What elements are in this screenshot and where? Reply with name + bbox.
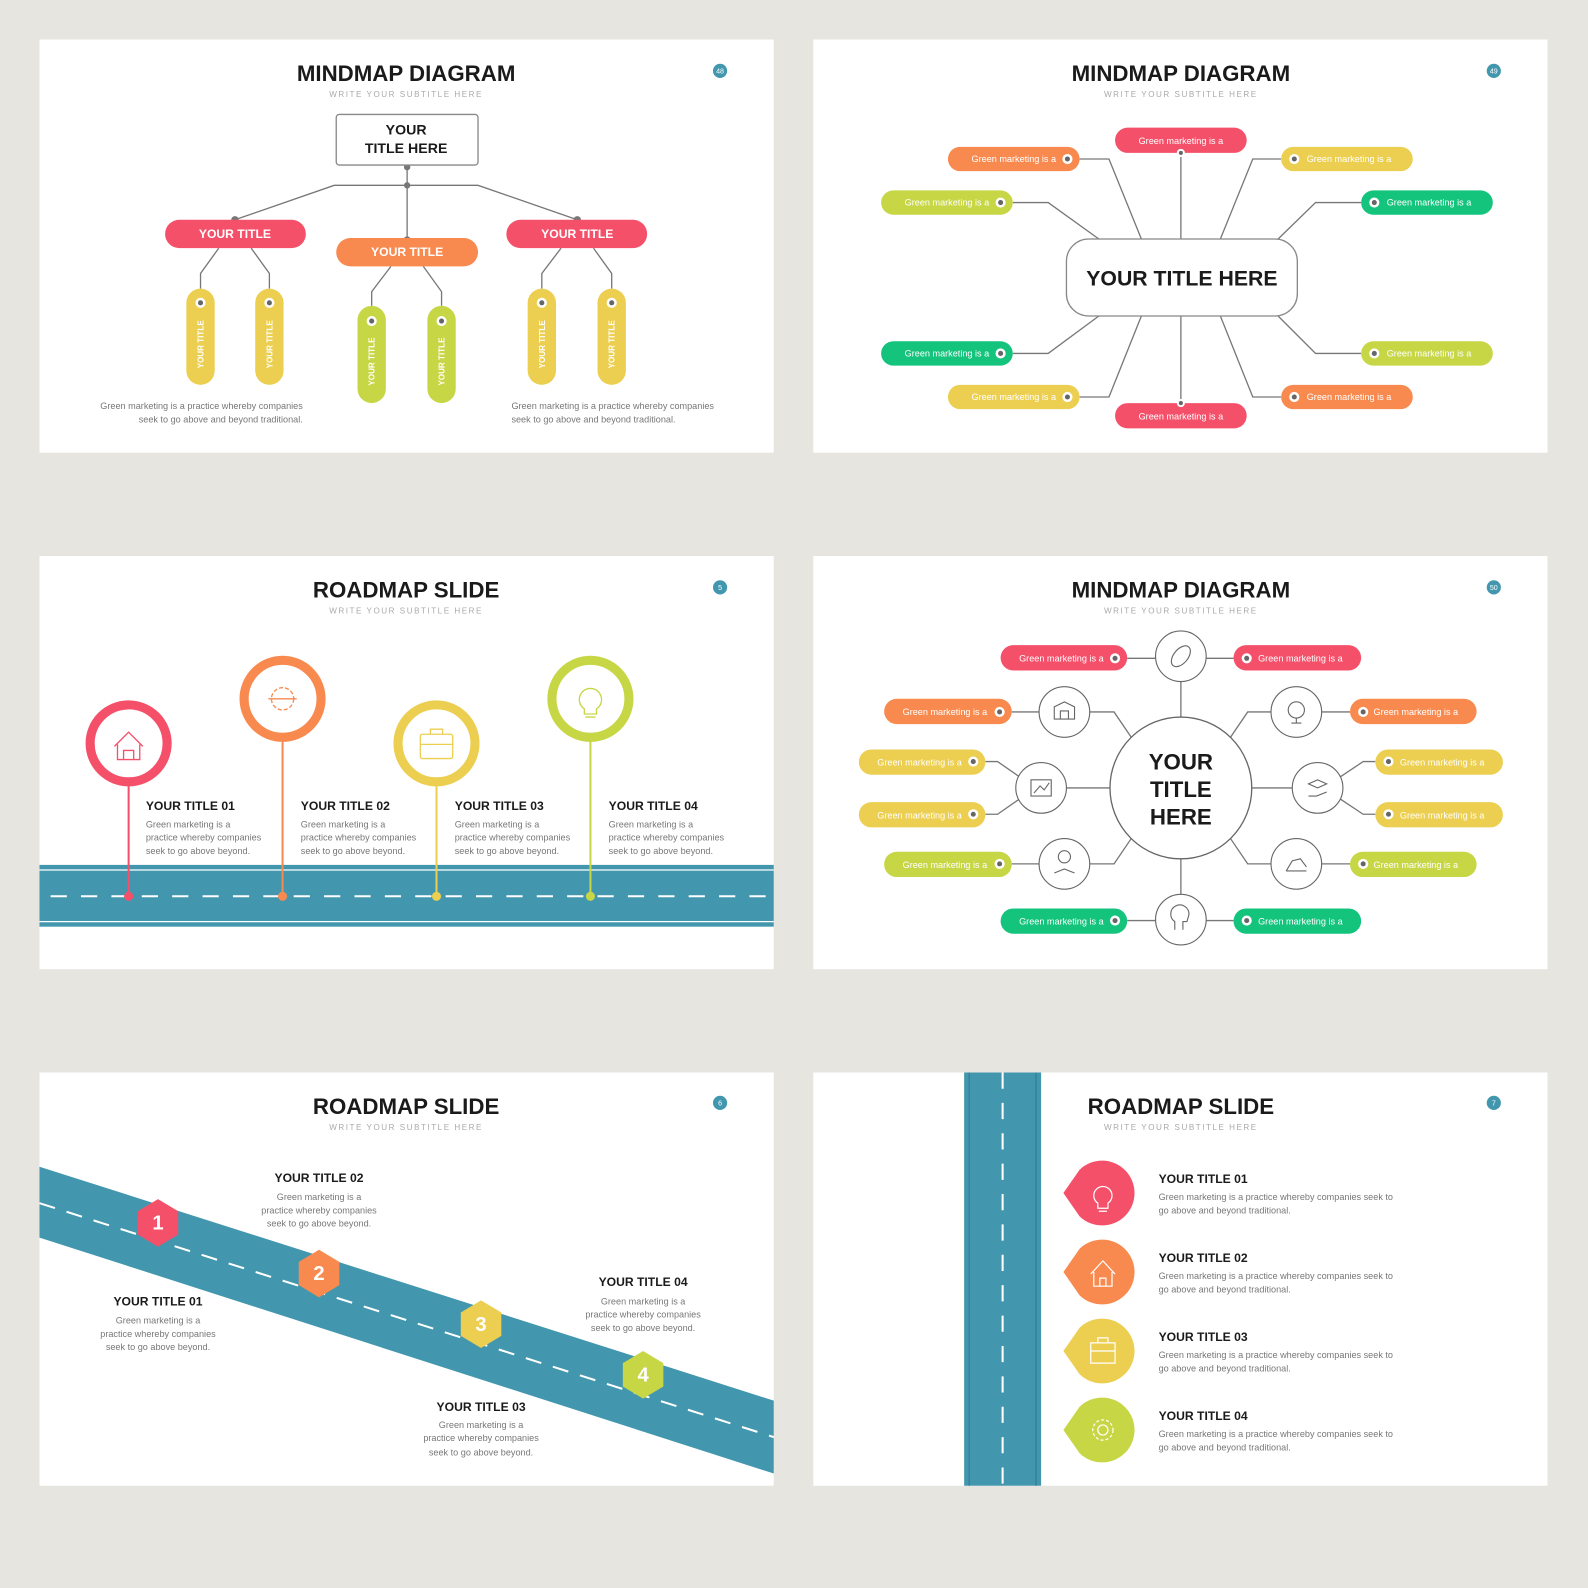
text blocks: YOUR TITLE 03 [455,799,544,813]
text blocks: Green marketing is a practice whereby companies seek to [1159,1429,1393,1439]
central box: YOUR [386,123,427,139]
text blocks: Green marketing is a practice whereby companies seek to [1159,1350,1393,1360]
vertical sub pills: YOUR TITLE [608,320,617,368]
hexagon markers [138,1199,663,1399]
pin 4 [552,660,629,901]
text blocks: seek to go above beyond. [455,846,559,856]
central title box [1066,239,1297,316]
text blocks: seek to go above beyond. [267,1218,371,1228]
pills: Green marketing is a [971,154,1057,164]
pill: your title center [336,238,478,266]
pills: Green marketing is a [1307,392,1392,402]
pill: your title right [506,220,647,248]
text blocks: Green marketing is a [301,819,386,829]
pill: your title center: YOUR TITLE [371,245,443,259]
pills [881,128,1493,428]
hexagon markers: 1 [152,1212,164,1234]
pills: Green marketing is a [903,860,988,870]
pin 3 [398,705,475,901]
text blocks: seek to go above beyond. [106,1342,210,1352]
panel: mindmap diagram 48 [39,39,774,453]
pills: Green marketing is a [1400,810,1485,820]
page badge [713,1096,727,1110]
pills: Green marketing is a [903,707,988,717]
page badge: 5 [718,584,722,592]
text block left: Green marketing is a practice whereby companies [100,401,303,411]
text blocks: practice whereby companies [100,1329,216,1339]
page badge [1487,1096,1501,1110]
text blocks: practice whereby companies [609,833,725,843]
central box [336,114,478,165]
text blocks: go above and beyond traditional. [1159,1284,1291,1294]
hexagon markers: 2 [313,1263,325,1285]
central circle: TITLE [1150,777,1212,802]
subtitle: WRITE YOUR SUBTITLE HERE [1104,607,1258,616]
pills: Green marketing is a [1374,860,1459,870]
page badge [1487,580,1501,594]
text blocks: Green marketing is a practice whereby companies seek to [1159,1271,1393,1281]
text blocks: practice whereby companies [301,833,417,843]
connectors [1013,153,1361,403]
text blocks: practice whereby companies [261,1205,377,1215]
road [39,865,774,927]
panel: roadmap slide 6 [39,1073,774,1486]
title: MINDMAP DIAGRAM [1072,578,1290,603]
subtitle: WRITE YOUR SUBTITLE HERE [1104,90,1258,99]
subtitle: WRITE YOUR SUBTITLE HERE [1104,1123,1258,1132]
pills: Green marketing is a [1400,758,1485,768]
text blocks: YOUR TITLE 01 [1159,1172,1248,1186]
pills: Green marketing is a [1374,707,1459,717]
pills: Green marketing is a [877,758,963,768]
vertical sub pills: YOUR TITLE [438,337,447,386]
text blocks: practice whereby companies [146,833,262,843]
pills: Green marketing is a [1387,348,1472,358]
central circle [1110,717,1252,859]
pills: Green marketing is a [1258,653,1344,663]
page badge: 49 [1490,67,1498,75]
central box: TITLE HERE [365,141,447,157]
pills: Green marketing is a [905,348,990,358]
central circle: YOUR [1149,750,1213,775]
text blocks: Green marketing is a [439,1420,524,1430]
title: MINDMAP DIAGRAM [297,61,515,86]
text block right [511,401,714,424]
connectors [985,658,1375,921]
text blocks: go above and beyond traditional. [1159,1363,1291,1373]
page badge [1487,64,1501,78]
text blocks: YOUR TITLE 02 [301,799,390,813]
panel: mindmap diagram 50 [813,556,1547,969]
text blocks: seek to go above beyond. [609,846,713,856]
text blocks: practice whereby companies [455,833,571,843]
pill: your title left [165,220,306,248]
text blocks: YOUR TITLE 04 [1159,1409,1248,1423]
text blocks: Green marketing is a [116,1316,201,1326]
text blocks: YOUR TITLE 02 [274,1171,364,1185]
text blocks: go above and beyond traditional. [1159,1205,1291,1215]
text blocks: YOUR TITLE 04 [609,799,698,813]
text blocks: YOUR TITLE 03 [437,1400,526,1414]
hexagon markers: 3 [475,1314,487,1336]
pill: your title left: YOUR TITLE [199,227,271,241]
panel: roadmap slide 7 [813,1073,1547,1486]
text blocks: seek to go above beyond. [591,1323,695,1333]
text blocks [1159,1172,1393,1452]
text blocks: Green marketing is a [455,819,540,829]
subtitle: WRITE YOUR SUBTITLE HERE [329,90,483,99]
pills: Green marketing is a [1307,154,1392,164]
vertical sub pills [186,289,626,403]
page badge [713,580,727,594]
title: ROADMAP SLIDE [313,578,499,603]
text blocks: seek to go above beyond. [146,846,250,856]
text blocks: YOUR TITLE 04 [599,1275,688,1289]
vertical road [964,1073,1041,1486]
text block right: seek to go above and beyond traditional. [511,414,676,424]
text block right: Green marketing is a practice whereby companies [511,401,714,411]
text blocks: seek to go above beyond. [429,1447,533,1457]
pills: Green marketing is a [1258,917,1344,927]
pills: Green marketing is a [1139,136,1224,146]
text blocks: go above and beyond traditional. [1159,1442,1291,1452]
text blocks [146,799,725,856]
central circle: HERE [1150,804,1212,829]
text block left [100,401,303,424]
text blocks: practice whereby companies [585,1310,701,1320]
pills: Green marketing is a [877,810,963,820]
text blocks: YOUR TITLE 03 [1159,1330,1248,1344]
title: ROADMAP SLIDE [313,1094,499,1119]
vertical sub pills: YOUR TITLE [197,320,206,368]
pills: Green marketing is a [1019,653,1105,663]
title: MINDMAP DIAGRAM [1072,61,1290,86]
text blocks: practice whereby companies [423,1433,539,1443]
icon circles [1016,631,1343,945]
title: ROADMAP SLIDE [1088,1094,1274,1119]
panel: mindmap diagram 49 [813,39,1547,453]
subtitle: WRITE YOUR SUBTITLE HERE [329,607,483,616]
pills: Green marketing is a [1019,917,1105,927]
pin 1 [90,705,167,901]
pills: Green marketing is a [905,198,990,208]
vertical sub pills: YOUR TITLE [265,320,274,368]
page badge: 50 [1490,584,1498,592]
text blocks: Green marketing is a [146,819,231,829]
text blocks: YOUR TITLE 02 [1159,1251,1248,1265]
vertical sub pills: YOUR TITLE [538,320,547,368]
pills: Green marketing is a [1139,411,1224,421]
pills [859,645,1503,934]
page badge: 48 [716,67,724,75]
text block left: seek to go above and beyond traditional. [139,414,303,424]
page badge: 7 [1492,1099,1496,1107]
text blocks: Green marketing is a [609,819,694,829]
teardrop markers [1063,1161,1135,1462]
connectors [201,165,612,306]
panel: roadmap slide 5 [39,556,774,969]
pills: Green marketing is a [971,392,1057,402]
text blocks: seek to go above beyond. [301,846,405,856]
text blocks: Green marketing is a practice whereby companies seek to [1159,1192,1393,1202]
text blocks: Green marketing is a [277,1192,362,1202]
subtitle: WRITE YOUR SUBTITLE HERE [329,1123,483,1132]
diagonal road [39,1167,774,1474]
pills: Green marketing is a [1387,198,1472,208]
page badge [713,64,727,78]
text blocks: Green marketing is a [601,1296,686,1306]
pin 2 [244,660,321,901]
hexagon markers: 4 [637,1364,649,1386]
text blocks: YOUR TITLE 01 [146,799,235,813]
text blocks: YOUR TITLE 01 [113,1294,203,1308]
page badge: 6 [718,1099,722,1107]
text blocks [100,1171,701,1457]
vertical sub pills: YOUR TITLE [368,337,377,386]
pill: your title right: YOUR TITLE [541,227,613,241]
central title box: YOUR TITLE HERE [1086,267,1278,291]
